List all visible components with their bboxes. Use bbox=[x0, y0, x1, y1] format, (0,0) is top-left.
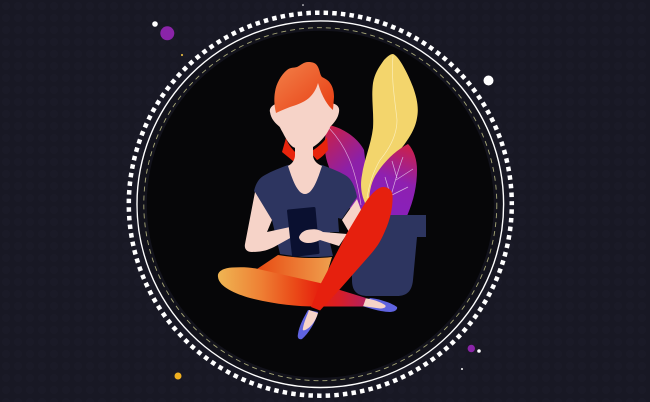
shirt bbox=[254, 165, 357, 257]
circular badge bbox=[129, 13, 512, 396]
foot: left bbox=[298, 310, 318, 339]
hair back bbox=[282, 137, 328, 161]
back purple leaf bbox=[325, 125, 366, 214]
foot: right bbox=[362, 298, 397, 312]
phone bbox=[288, 208, 318, 256]
arms bbox=[245, 192, 364, 252]
yellow leaf bbox=[361, 54, 418, 208]
leg: diagonal bbox=[311, 187, 393, 310]
head bbox=[270, 78, 339, 149]
pot bbox=[352, 215, 426, 296]
decorative dots bbox=[152, 4, 493, 379]
hair bbox=[274, 62, 334, 113]
leg: horizontal bbox=[218, 267, 366, 306]
front purple leaf bbox=[369, 144, 417, 216]
hand bbox=[299, 229, 347, 246]
pants bbox=[257, 255, 332, 290]
plant bbox=[325, 54, 426, 296]
neck bbox=[288, 140, 322, 194]
woman bbox=[218, 62, 397, 339]
